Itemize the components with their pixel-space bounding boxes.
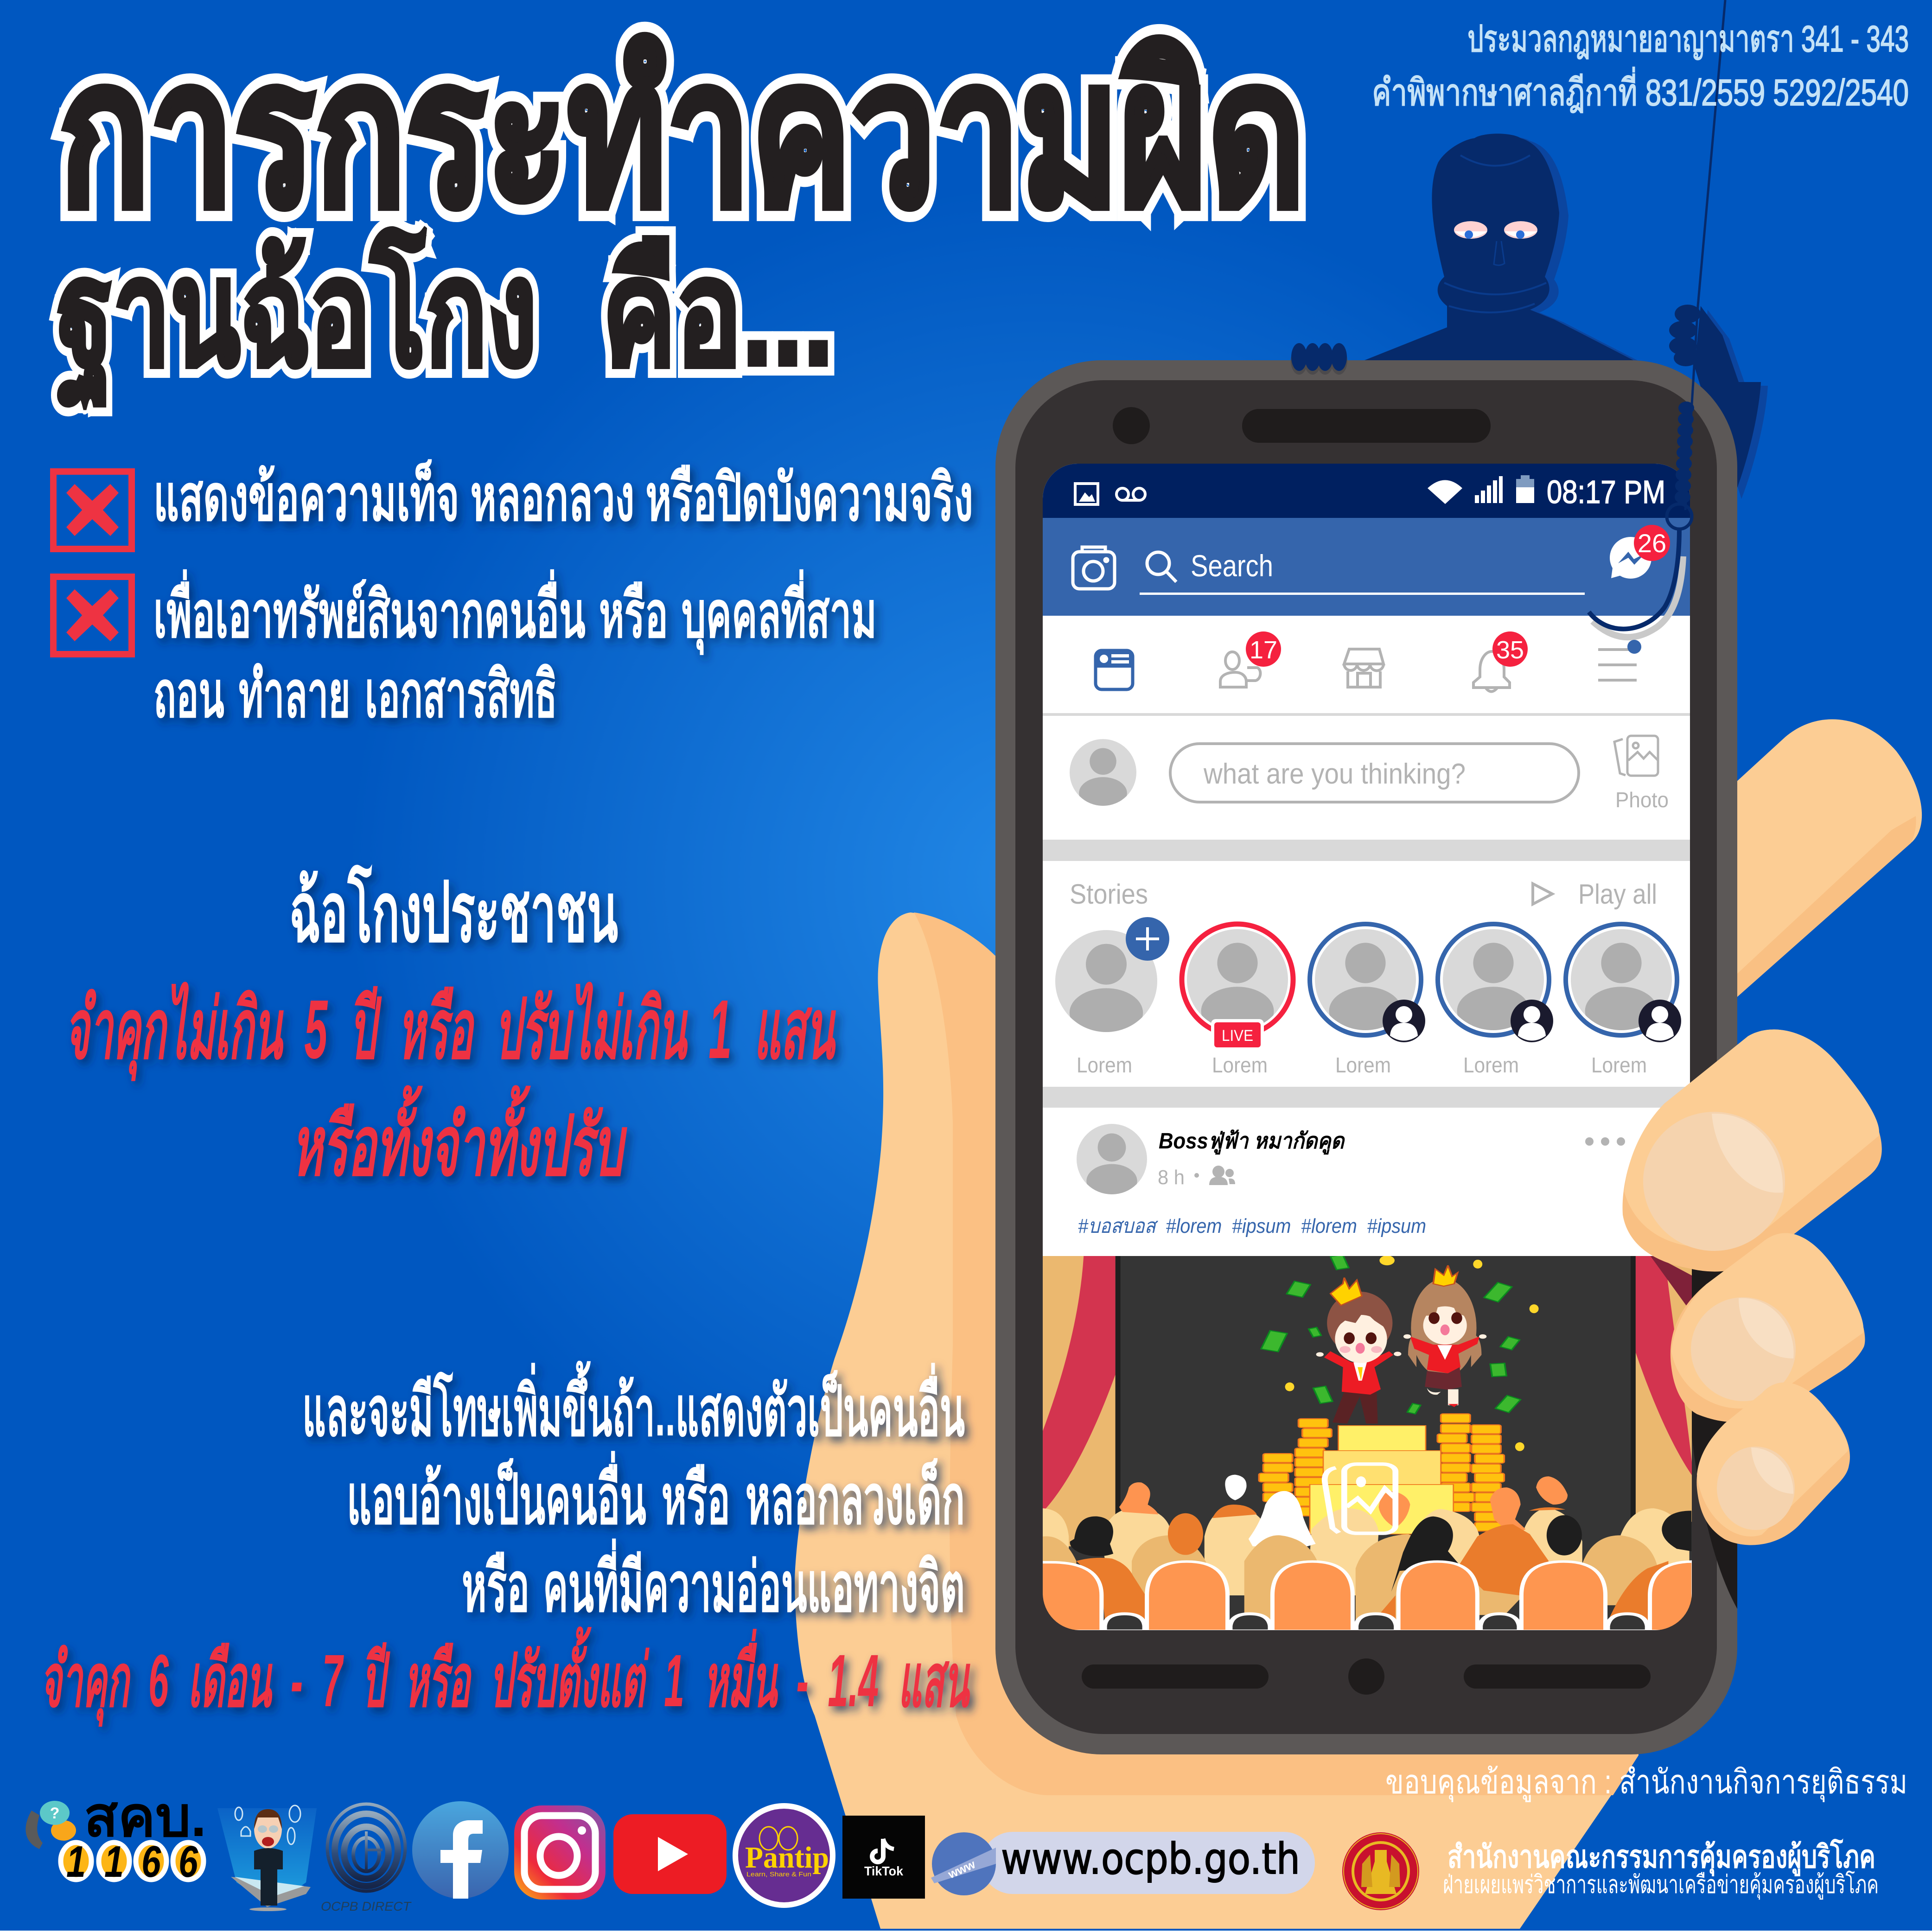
text: แสดงข้อความเท็จ หลอกลวง หรือปิดบังความจริง xyxy=(153,459,973,534)
title line 2: ฐานฉ้อโกง xyxy=(57,225,537,411)
title line 1: การกระทำความผิด xyxy=(59,20,1305,248)
input placeholder: what are you thinking? xyxy=(1203,758,1466,790)
icon: red cross box xyxy=(53,472,132,549)
icon: wifi xyxy=(1428,480,1462,504)
hotline digits: 6 xyxy=(141,1837,161,1887)
avatar xyxy=(1070,739,1136,809)
post avatar xyxy=(1077,1124,1147,1198)
story: user 1 xyxy=(1310,924,1425,1042)
right curtain xyxy=(1631,1252,1695,1522)
fishing line and hook xyxy=(1589,0,1725,654)
title line 2: คือ... xyxy=(602,230,834,396)
icon: instagram xyxy=(514,1805,606,1900)
badge: messenger count xyxy=(1634,525,1670,561)
search label: Search xyxy=(1191,548,1273,583)
thief fingers on phone xyxy=(1291,343,1347,375)
nav icons xyxy=(1096,631,1637,692)
thief eyes xyxy=(1454,221,1537,239)
hotline digits: 6 xyxy=(179,1837,198,1887)
aggravated text line 1: และจะมีโทษเพิ่มขึ้นถ้า..แสดงตัวเป็นคนอื่น xyxy=(302,1360,965,1450)
hook xyxy=(1589,529,1679,629)
status bar xyxy=(1043,464,1690,518)
audience hair front xyxy=(1070,1491,1691,1631)
title line 2: คือ... xyxy=(602,230,834,396)
badge: messenger count: 26 xyxy=(1638,529,1666,558)
post time: 8 h xyxy=(1158,1166,1185,1189)
composer row xyxy=(1070,736,1669,812)
podium xyxy=(1310,1426,1454,1534)
index finger xyxy=(1623,1029,1882,1272)
footer logo: presenter xyxy=(217,1805,317,1911)
middle nail xyxy=(1691,1297,1796,1401)
thief arm xyxy=(1702,310,1768,499)
search underline xyxy=(1140,593,1585,595)
audience back row xyxy=(1043,1508,1690,1595)
icon: voicemail xyxy=(1116,488,1145,500)
story: live xyxy=(1182,924,1293,1050)
icon: news feed xyxy=(1096,650,1133,689)
screen white base xyxy=(1043,464,1690,1261)
icon: image xyxy=(1075,484,1098,504)
icon: battery xyxy=(1516,475,1534,503)
footer logo: OCPB 1166 xyxy=(26,1786,206,1887)
speaker xyxy=(1242,409,1491,443)
hotline digits xyxy=(61,1837,204,1887)
penalty heading: ฉ้อโกงประชาชน xyxy=(289,864,618,959)
penalty line 2: หรือทั้งจำทั้งปรับ xyxy=(292,1085,627,1193)
icon: camera xyxy=(1073,547,1115,589)
aggravated text line 2: แอบอ้างเป็นคนอื่น หรือ หลอกลวงเด็ก xyxy=(347,1451,965,1538)
icon: friends xyxy=(1220,652,1260,687)
icon: globe: www xyxy=(945,1857,978,1881)
orange seats xyxy=(1039,1562,1694,1631)
index nail xyxy=(1643,1112,1785,1251)
thief silhouette xyxy=(1365,134,1768,499)
story labels: Lorem xyxy=(1591,1053,1647,1077)
story: own xyxy=(1055,917,1169,1037)
story labels: Lorem xyxy=(1463,1053,1519,1077)
post header xyxy=(1077,1124,1625,1237)
story labels: Lorem xyxy=(1212,1053,1268,1077)
stars xyxy=(1285,1256,1539,1451)
clock: 08:17 PM xyxy=(1547,474,1665,510)
text line 2: ถอน ทำลาย เอกสารสิทธิ xyxy=(153,658,557,731)
hand: palm xyxy=(795,912,1639,1929)
icon: facebook xyxy=(412,1801,509,1899)
badge: friends count xyxy=(1246,631,1281,667)
icon: tiktok: TikTok xyxy=(864,1864,903,1878)
audience heads back xyxy=(1119,1475,1568,1546)
text line 1: เพื่อเอาทรัพย์สินจากคนอื่น หรือ บุคคลที่สาม xyxy=(153,569,877,655)
badge: notifications count xyxy=(1492,631,1528,667)
icon: globe xyxy=(931,1832,996,1895)
finger shadow xyxy=(1692,1252,1737,1609)
post author: Bossฟู่ฟ้า หมากัดคูด xyxy=(1159,1129,1345,1155)
flying banknotes xyxy=(1261,1255,1521,1414)
thief fist xyxy=(1669,305,1701,366)
play all label: Play all xyxy=(1578,879,1657,910)
ring nail xyxy=(1717,1447,1795,1530)
placeholder image icon xyxy=(1325,1464,1396,1533)
icon: photo xyxy=(1614,736,1658,776)
icon: red cross box xyxy=(53,577,132,654)
story: user 2 xyxy=(1438,924,1553,1042)
story labels: Lorem xyxy=(1077,1053,1132,1077)
icon: pantip: Pantip xyxy=(745,1841,829,1875)
title line 1: การกระทำความผิด xyxy=(59,20,1305,248)
badge: friends count: 17 xyxy=(1250,636,1277,664)
small chairs xyxy=(1104,1614,1647,1631)
eye ring xyxy=(1667,504,1692,529)
coin stacks xyxy=(1259,1414,1504,1531)
icon: audience xyxy=(1209,1166,1235,1185)
icon: menu xyxy=(1598,648,1637,682)
law reference xyxy=(1372,18,1909,113)
bullet 1 xyxy=(53,459,973,549)
home button xyxy=(1348,1658,1384,1695)
caption: OCPB DIRECT xyxy=(321,1899,412,1913)
beads xyxy=(1675,402,1694,504)
phone chat icon: ? xyxy=(50,1804,59,1822)
photo label: Photo xyxy=(1615,788,1669,812)
icon: youtube xyxy=(613,1814,727,1894)
aggravated text line 3: หรือ คนที่มีความอ่อนแอทางจิต xyxy=(462,1538,965,1626)
footer logo: OCPB seal xyxy=(321,1804,412,1913)
story labels: Lorem xyxy=(1335,1053,1391,1077)
hashtags: #บอสบอส #lorem #ipsum #lorem #ipsum xyxy=(1078,1215,1426,1237)
hook shadow xyxy=(1593,556,1683,637)
post illustration xyxy=(1039,1252,1702,1637)
icon: pantip xyxy=(735,1806,833,1905)
icon: store xyxy=(1344,649,1384,687)
girl character xyxy=(1403,1265,1486,1407)
hotline digits: 1 xyxy=(104,1837,124,1887)
story: live: LIVE xyxy=(1222,1027,1253,1045)
hand: thumb behind phone xyxy=(1715,719,1922,997)
audience middle row xyxy=(1043,1534,1658,1620)
more dots xyxy=(1585,1137,1625,1146)
badge: notifications count: 35 xyxy=(1496,636,1524,664)
stories panel xyxy=(1055,879,1681,1077)
icon: messenger xyxy=(1610,537,1651,579)
bottom left key xyxy=(1082,1664,1269,1689)
left curtain xyxy=(1039,1252,1121,1546)
government seal xyxy=(1342,1832,1419,1910)
input pill xyxy=(1170,744,1579,802)
story labels xyxy=(1077,1053,1647,1077)
hotline digits: 1 xyxy=(66,1837,86,1887)
bottom right key xyxy=(1464,1664,1651,1689)
icon: bell xyxy=(1473,651,1510,692)
penalty line 1: จำคุกไม่เกิน 5 ปี หรือ ปรับไม่เกิน 1 แสน xyxy=(65,982,836,1081)
title line 2: ฐานฉ้อโกง xyxy=(57,225,537,411)
agency name: สคบ. xyxy=(84,1786,206,1848)
icon: magnifier xyxy=(1147,552,1176,582)
icon: signal xyxy=(1475,476,1503,503)
text: จำคุก 6 เดือน - 7 ปี หรือ ปรับตั้งแต่ 1 หมื่น - 1.4 แสน xyxy=(40,1626,970,1727)
icon: pantip: Learn, Share & Fun xyxy=(746,1870,811,1878)
icon: tiktok xyxy=(842,1816,925,1899)
boy character xyxy=(1316,1278,1401,1424)
icon: play xyxy=(1533,884,1552,904)
middle finger xyxy=(1671,1233,1865,1422)
ring finger xyxy=(1696,1383,1850,1545)
website pill: www.ocpb.go.th xyxy=(1001,1834,1300,1884)
bullet 2 xyxy=(53,569,877,731)
story: user 3 xyxy=(1566,924,1681,1042)
stories heading: Stories xyxy=(1070,879,1148,910)
phone body xyxy=(995,360,1737,1754)
fishing line xyxy=(1685,0,1725,510)
hook bead xyxy=(1627,640,1641,654)
search bar xyxy=(1043,518,1690,616)
phone chat icon xyxy=(26,1801,76,1849)
front camera xyxy=(1113,407,1150,444)
